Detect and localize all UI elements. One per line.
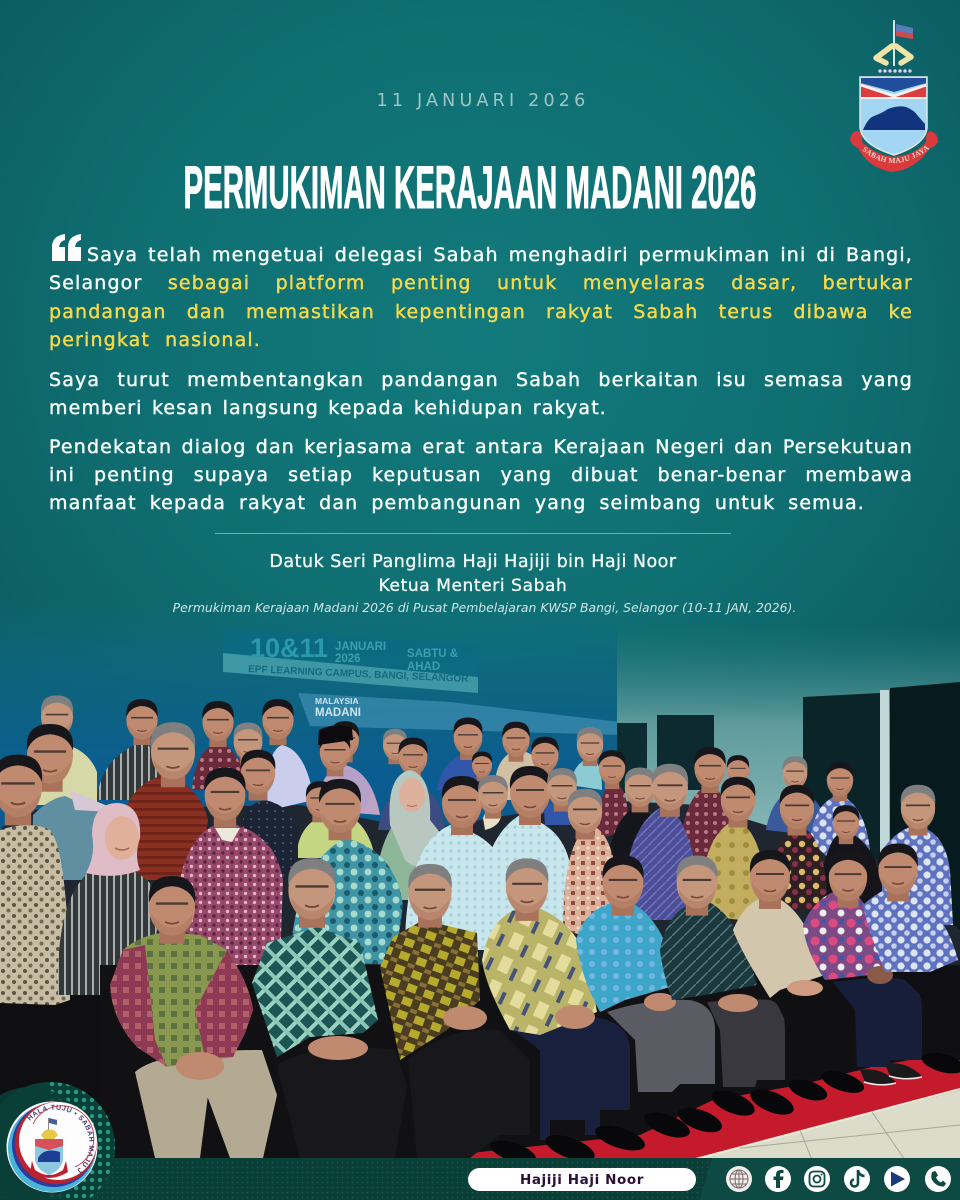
blue stage backdrop <box>0 600 617 1170</box>
opening quotation mark <box>52 234 81 261</box>
circular Hala Tuju badge <box>0 1082 115 1198</box>
speaker name: Datuk Seri Panglima Haji Hajiji bin Haji Noor <box>269 552 677 572</box>
paragraph two <box>49 369 913 419</box>
crest golden hands <box>876 46 911 63</box>
event caption: Permukiman Kerajaan Madani 2026 di Pusat Pembelajaran KWSP Bangi, Selangor (10-11 JAN, 2026). <box>173 600 796 615</box>
back row of delegates <box>10 695 953 925</box>
paragraph three: Pendekatan dialog dan kerjasama erat antara Kerajaan Negeri dan Persekutuan <box>49 436 913 458</box>
seated delegate: gold-green batik <box>482 858 630 1140</box>
event banner on backdrop: SABTU & <box>407 648 458 660</box>
Sabah state crest <box>850 20 938 172</box>
event banner on backdrop: EPF LEARNING CAMPUS, BANGI, SELANGOR <box>248 664 469 685</box>
icon: instagram <box>804 1166 830 1192</box>
standing front row <box>0 755 403 1115</box>
event banner on backdrop: MALAYSIA <box>315 696 359 706</box>
date: 11 JANUARI 2026 <box>377 91 589 111</box>
floor and red carpet <box>395 1050 960 1160</box>
icon: youtube play <box>884 1166 910 1192</box>
event banner on backdrop: MADANI <box>315 707 361 719</box>
paragraph one: Selangor sebagai platform penting untuk menyelaras dasar, bertukar <box>49 272 913 294</box>
middle row of delegates <box>27 722 828 950</box>
icon: phone <box>925 1166 951 1192</box>
icon: website globe <box>726 1166 752 1192</box>
seated delegate: dark teal batik <box>660 855 785 1087</box>
seated delegate: teal batik <box>252 858 407 1158</box>
event banner on backdrop: 2026 <box>335 653 361 665</box>
bottom footer bar <box>0 1158 960 1200</box>
quote body text <box>49 244 913 514</box>
seated delegate: yellow batik <box>380 864 530 1158</box>
crest motto ribbon: SABAH MAJU JAYA <box>862 146 930 164</box>
attribution <box>173 552 796 615</box>
paragraph three: ini penting supaya setiap keputusan yang dibuat benar-benar membawa <box>49 464 913 486</box>
event banner on backdrop: AHAD <box>407 661 440 673</box>
divider line <box>215 532 731 534</box>
seated delegate: sky blue batik <box>576 855 715 1092</box>
seated delegate: blue and white batik <box>863 844 960 1053</box>
event banner on backdrop: 10&11 <box>250 633 328 663</box>
crest flag and pole <box>893 20 913 66</box>
dark chairs behind seated row <box>100 965 960 1162</box>
crest motto ribbon <box>850 131 938 172</box>
paragraph three <box>49 436 913 514</box>
seated delegate: pink and blue batik <box>803 851 922 1067</box>
polished shoes <box>487 1049 960 1168</box>
paragraph one: peringkat nasional. <box>49 329 261 351</box>
paragraph one <box>49 244 913 351</box>
footer name pill: Hajiji Haji Noor <box>520 1172 644 1188</box>
paragraph one: Saya telah mengetuai delegasi Sabah menghadiri permukiman ini di Bangi, <box>87 244 913 266</box>
footer name pill <box>468 1168 696 1191</box>
building wall with windows <box>617 625 960 1170</box>
event banner on backdrop: JANUARI <box>335 641 386 653</box>
crest shield <box>860 77 927 155</box>
crest beads <box>878 69 912 73</box>
paragraph two: memberi kesan langsung kepada kehidupan rakyat. <box>49 397 607 419</box>
icon: tiktok <box>844 1166 870 1192</box>
icon: facebook <box>765 1166 791 1192</box>
mini crest in badge <box>30 1118 68 1178</box>
paragraph three: manfaat kepada rakyat dan pembangunan yang seimbang untuk semua. <box>49 492 865 514</box>
crowd shadow behind people <box>0 800 960 1010</box>
seated delegate: multicolour batik <box>110 876 277 1158</box>
paragraph one: pandangan dan memastikan kepentingan rakyat Sabah terus dibawa ke <box>49 301 913 323</box>
speaker role: Ketua Menteri Sabah <box>379 576 567 596</box>
seated row of leaders <box>110 844 960 1168</box>
paragraph two: Saya turut membentangkan pandangan Sabah berkaitan isu semasa yang <box>49 369 913 391</box>
event banner on backdrop <box>223 630 620 735</box>
seated delegate: beige shirt <box>733 850 852 1077</box>
